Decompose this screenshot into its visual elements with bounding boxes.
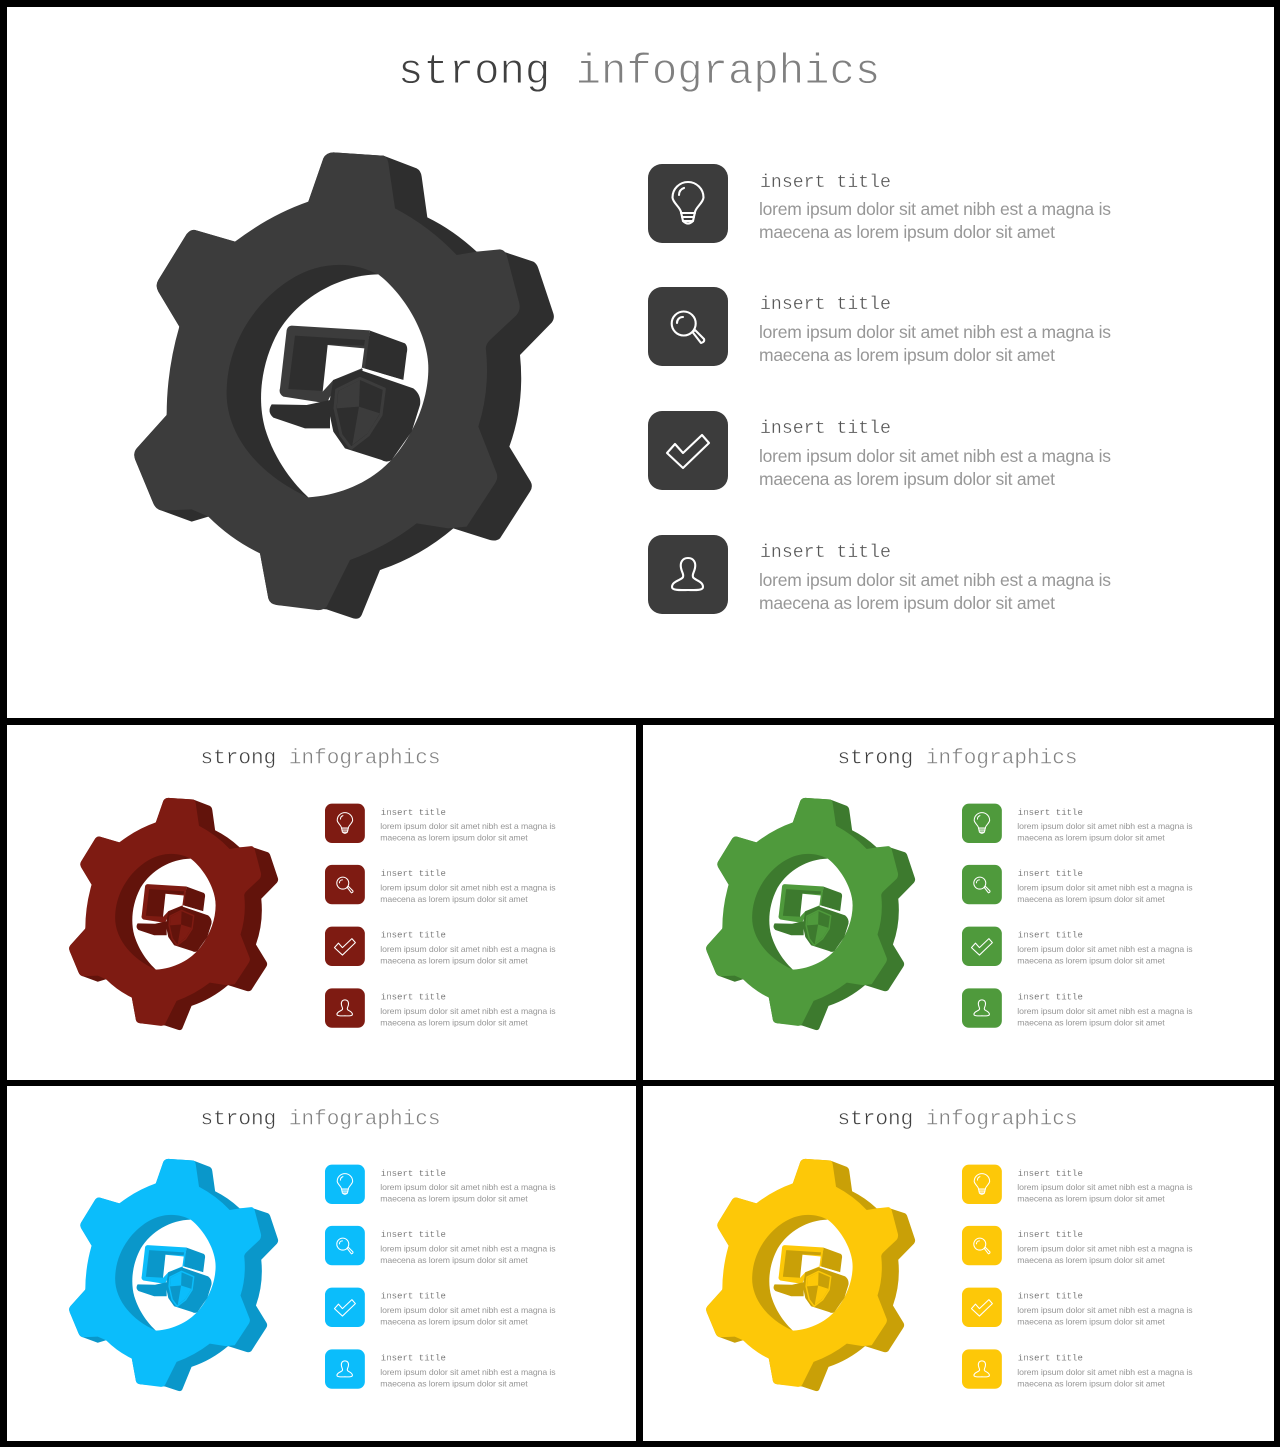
item 2 text: maecena as lorem ipsum dolor sit amet — [759, 345, 1055, 365]
red text list: insert title — [381, 991, 446, 1002]
panel: yellow variant — [643, 1086, 1274, 1441]
red text list: insert title — [381, 930, 446, 941]
red text list: insert title — [381, 807, 446, 818]
green icons — [962, 804, 1002, 1028]
panel: blue variant — [7, 1086, 636, 1441]
green text list: maecena as lorem ipsum dolor sit amet — [1017, 1017, 1165, 1027]
yellow text list: lorem ipsum dolor sit amet nibh est a magna is — [1017, 1305, 1193, 1315]
item 3 text: insert title — [760, 419, 891, 439]
yellow icons — [962, 1165, 1002, 1389]
item 2 — [648, 287, 1111, 366]
icon: user — [648, 535, 728, 614]
item 4 — [648, 535, 1111, 614]
icon: check mark — [648, 411, 728, 490]
blue text list: insert title — [381, 1229, 446, 1240]
green text list: insert title — [1018, 930, 1083, 941]
blue text list: maecena as lorem ipsum dolor sit amet — [380, 1194, 528, 1204]
green text list: maecena as lorem ipsum dolor sit amet — [1017, 833, 1165, 843]
green title: strong infographics — [838, 746, 1077, 770]
yellow text list: lorem ipsum dolor sit amet nibh est a magna is — [1017, 1182, 1193, 1192]
green text list: insert title — [1018, 807, 1083, 818]
yellow gear — [706, 1159, 915, 1391]
red icons — [325, 804, 365, 1028]
item 3 — [648, 411, 1111, 490]
blue text list: maecena as lorem ipsum dolor sit amet — [380, 1255, 528, 1265]
yellow text list: lorem ipsum dolor sit amet nibh est a magna is — [1017, 1367, 1193, 1377]
item 1 — [648, 164, 1111, 243]
yellow text list: insert title — [1018, 1168, 1083, 1179]
yellow text list: maecena as lorem ipsum dolor sit amet — [1017, 1255, 1165, 1265]
yellow title: strong infographics — [838, 1107, 1077, 1131]
item 4 text — [759, 543, 1111, 613]
panel: dark main — [7, 7, 1274, 718]
blue icons — [325, 1165, 365, 1389]
green text list: lorem ipsum dolor sit amet nibh est a magna is — [1017, 944, 1193, 954]
yellow text list: insert title — [1018, 1291, 1083, 1302]
item 1 text: lorem ipsum dolor sit amet nibh est a magna is — [759, 199, 1111, 219]
yellow text list: insert title — [1018, 1352, 1083, 1363]
item 2 text: insert title — [760, 295, 891, 315]
yellow text list: maecena as lorem ipsum dolor sit amet — [1017, 1378, 1165, 1388]
item 2 text: lorem ipsum dolor sit amet nibh est a magna is — [759, 322, 1111, 342]
panel: red variant — [7, 725, 636, 1080]
red text list: lorem ipsum dolor sit amet nibh est a magna is — [380, 882, 556, 892]
item 4 text: insert title — [760, 543, 891, 563]
green text list: lorem ipsum dolor sit amet nibh est a magna is — [1017, 1006, 1193, 1016]
green text list — [1017, 807, 1193, 1027]
green text list: maecena as lorem ipsum dolor sit amet — [1017, 894, 1165, 904]
item 1 text: maecena as lorem ipsum dolor sit amet — [759, 222, 1055, 242]
blue text list: lorem ipsum dolor sit amet nibh est a magna is — [380, 1182, 556, 1192]
item 1 text: insert title — [760, 173, 891, 193]
red title: strong infographics — [201, 746, 440, 770]
item 4 text: maecena as lorem ipsum dolor sit amet — [759, 593, 1055, 613]
green text list: insert title — [1018, 868, 1083, 879]
blue text list: insert title — [381, 1352, 446, 1363]
title: strong infographics — [398, 48, 880, 96]
yellow text list: insert title — [1018, 1229, 1083, 1240]
green text list: lorem ipsum dolor sit amet nibh est a magna is — [1017, 882, 1193, 892]
blue text list: lorem ipsum dolor sit amet nibh est a magna is — [380, 1305, 556, 1315]
red text list: lorem ipsum dolor sit amet nibh est a magna is — [380, 1006, 556, 1016]
green text list: lorem ipsum dolor sit amet nibh est a magna is — [1017, 821, 1193, 831]
yellow text list: lorem ipsum dolor sit amet nibh est a magna is — [1017, 1243, 1193, 1253]
red gear — [69, 798, 278, 1030]
blue text list — [380, 1168, 556, 1388]
yellow text list — [1017, 1168, 1193, 1388]
red text list — [380, 807, 556, 1027]
red text list: maecena as lorem ipsum dolor sit amet — [380, 833, 528, 843]
item 2 text — [759, 295, 1111, 365]
blue gear — [69, 1159, 278, 1391]
green gear — [706, 798, 915, 1030]
blue text list: lorem ipsum dolor sit amet nibh est a magna is — [380, 1243, 556, 1253]
green text list: maecena as lorem ipsum dolor sit amet — [1017, 956, 1165, 966]
red text list: lorem ipsum dolor sit amet nibh est a magna is — [380, 944, 556, 954]
blue text list: insert title — [381, 1168, 446, 1179]
red text list: maecena as lorem ipsum dolor sit amet — [380, 956, 528, 966]
item 3 text: lorem ipsum dolor sit amet nibh est a magna is — [759, 446, 1111, 466]
blue text list: insert title — [381, 1291, 446, 1302]
blue text list: lorem ipsum dolor sit amet nibh est a magna is — [380, 1367, 556, 1377]
red text list: maecena as lorem ipsum dolor sit amet — [380, 1017, 528, 1027]
item 3 text — [759, 419, 1111, 489]
item 4 text: lorem ipsum dolor sit amet nibh est a magna is — [759, 570, 1111, 590]
icon: magnifier — [648, 287, 728, 366]
gear graphic — [134, 152, 554, 619]
yellow text list: maecena as lorem ipsum dolor sit amet — [1017, 1317, 1165, 1327]
yellow text list: maecena as lorem ipsum dolor sit amet — [1017, 1194, 1165, 1204]
blue text list: maecena as lorem ipsum dolor sit amet — [380, 1378, 528, 1388]
blue text list: maecena as lorem ipsum dolor sit amet — [380, 1317, 528, 1327]
red text list: maecena as lorem ipsum dolor sit amet — [380, 894, 528, 904]
green text list: insert title — [1018, 991, 1083, 1002]
panel: green variant — [643, 725, 1274, 1080]
blue title: strong infographics — [201, 1107, 440, 1131]
red text list: insert title — [381, 868, 446, 879]
red text list: lorem ipsum dolor sit amet nibh est a magna is — [380, 821, 556, 831]
item 3 text: maecena as lorem ipsum dolor sit amet — [759, 469, 1055, 489]
item 1 text — [759, 173, 1111, 242]
icon: light bulb — [648, 164, 728, 243]
